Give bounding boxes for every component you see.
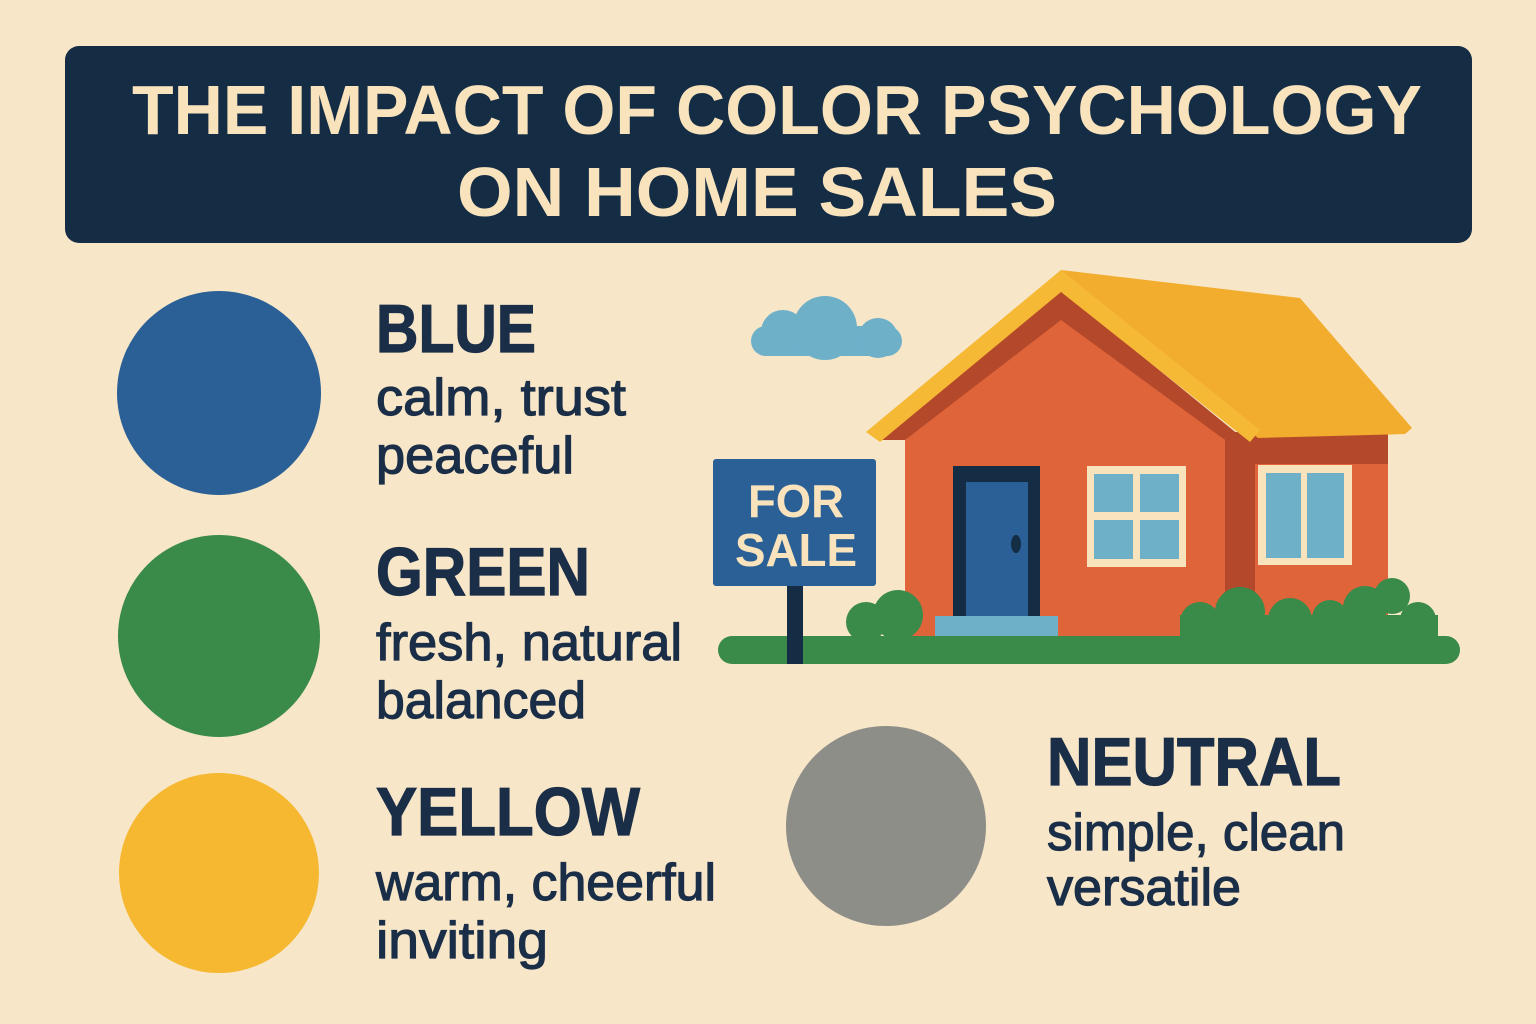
for sale sign: SALE — [735, 524, 857, 576]
icon: cloud — [751, 296, 902, 360]
roof edge — [866, 270, 1260, 442]
label: blue: calm, trust — [376, 369, 627, 427]
label: yellow: YELLOW — [376, 774, 641, 850]
swatch: blue — [117, 291, 321, 495]
step — [935, 616, 1058, 636]
label: neutral: NEUTRAL — [1047, 724, 1341, 800]
label: green: balanced — [376, 672, 586, 730]
label: neutral — [1047, 724, 1345, 917]
label: yellow: warm, cheerful — [375, 854, 716, 912]
ground — [718, 636, 1460, 664]
title banner: ON HOME SALES — [457, 153, 1057, 231]
window left — [1087, 466, 1186, 567]
label: blue: peaceful — [376, 427, 574, 485]
label: green — [376, 534, 682, 730]
label: neutral: simple, clean — [1047, 804, 1345, 862]
title banner — [65, 46, 1472, 243]
label: green: fresh, natural — [376, 614, 682, 672]
label: blue: BLUE — [376, 291, 536, 367]
front gable wall — [905, 305, 1225, 636]
label: neutral: versatile — [1047, 859, 1241, 917]
label: green: GREEN — [376, 534, 590, 610]
window right — [1258, 465, 1352, 565]
swatch: green — [118, 535, 320, 737]
gable shadow band — [880, 290, 1245, 440]
sign post — [787, 584, 803, 664]
for sale sign: FOR — [748, 475, 844, 527]
swatch: neutral — [786, 726, 986, 926]
bushes — [846, 578, 1438, 642]
swatch: yellow — [119, 773, 319, 973]
door — [953, 466, 1040, 616]
for sale sign — [713, 459, 876, 586]
label: yellow — [375, 774, 716, 970]
label: yellow: inviting — [376, 912, 548, 970]
label: blue — [376, 291, 627, 485]
title banner: THE IMPACT OF COLOR PSYCHOLOGY — [132, 71, 1422, 149]
right wing — [1225, 432, 1388, 636]
illustration: house with for sale sign — [713, 270, 1460, 664]
right roof — [1061, 270, 1412, 438]
